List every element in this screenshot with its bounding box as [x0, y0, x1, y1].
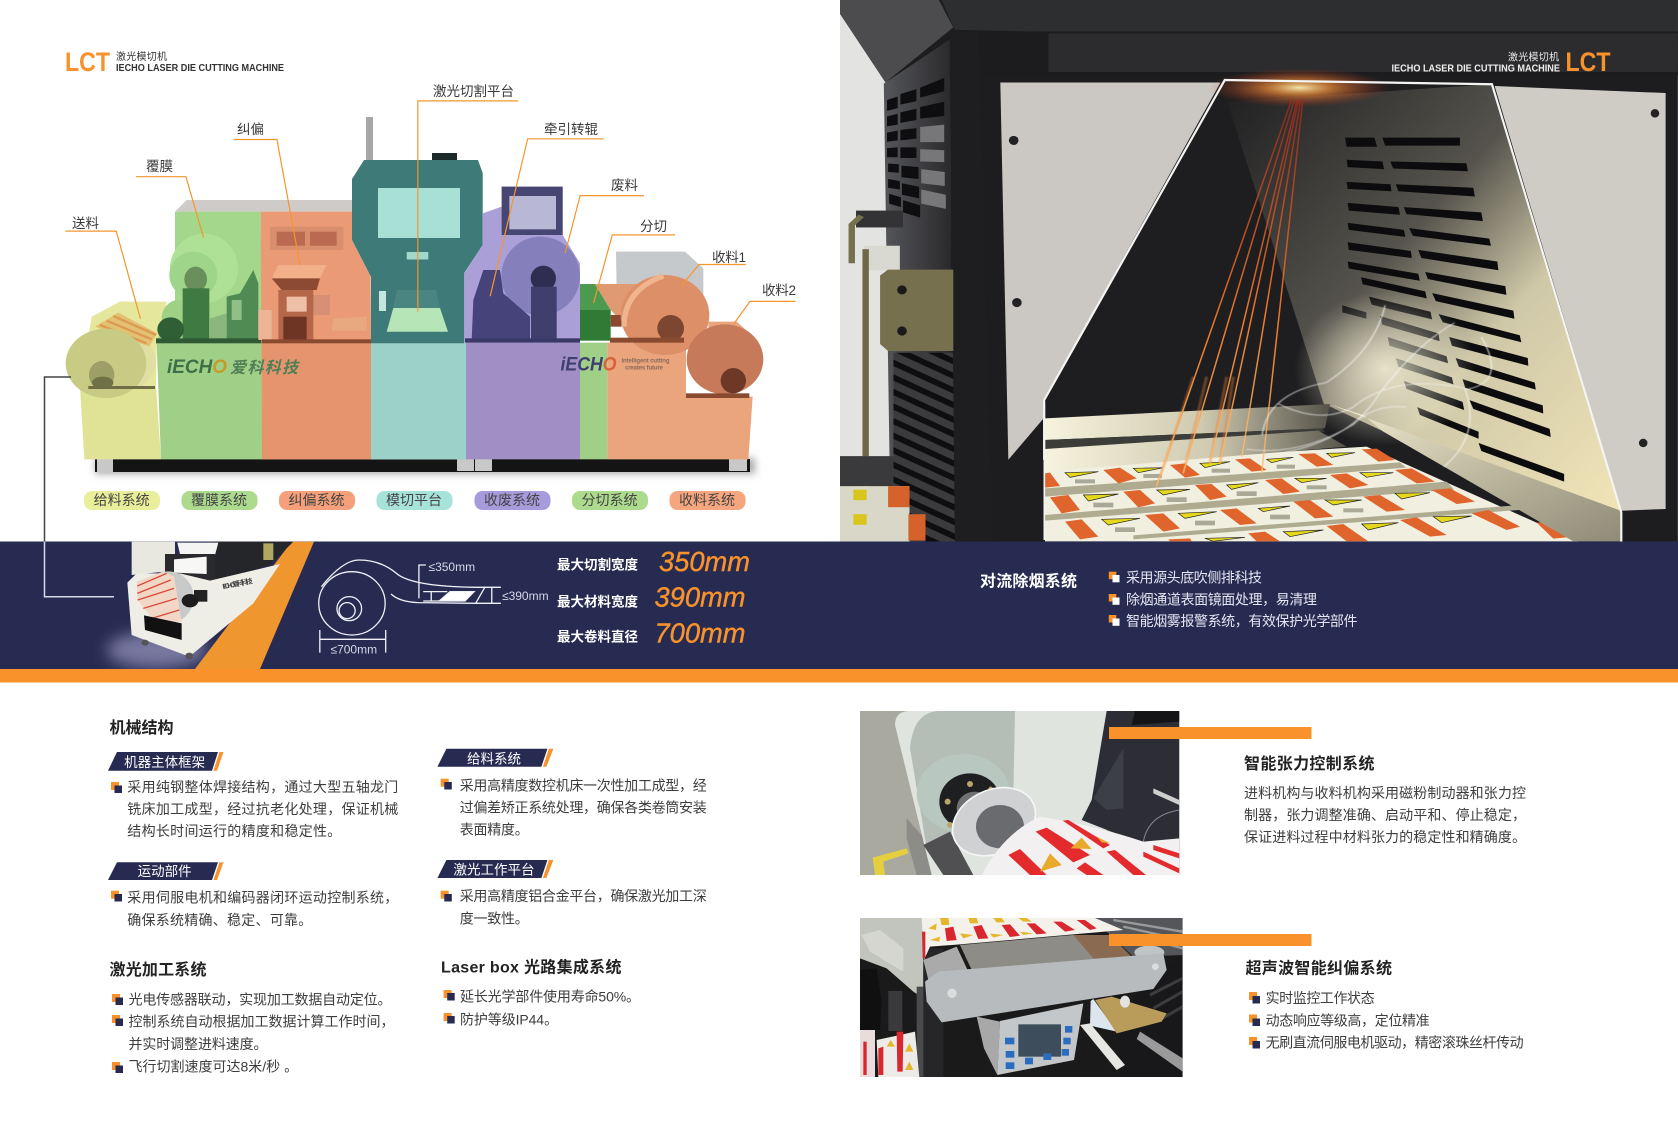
specification: max material width: 390mm — [654, 582, 746, 612]
zone: rewind (orange) — [595, 275, 763, 459]
callout labels: 废料 — [611, 178, 638, 193]
zone: die cutting tower (teal) — [352, 117, 483, 460]
text: web guide bullets: 无刷直流伺服电机驱动，精密滚珠丝杆传动 — [1266, 1034, 1524, 1050]
tag: machine frame — [108, 752, 224, 771]
leader line to feed unit close-up — [44, 377, 114, 597]
system legend pills: 收料系统 — [679, 492, 735, 508]
orange divider band — [0, 669, 1678, 682]
text: laser processing: 飞行切割速度可达8米/秒 。 — [128, 1058, 298, 1074]
text: tension control: 制器，张力调整准确、启动平和、停止稳定， — [1244, 807, 1526, 823]
roof — [840, 0, 953, 82]
side perforated panel — [884, 39, 960, 542]
text: laser work platform — [441, 888, 707, 926]
callout labels: 收料2 — [762, 283, 796, 298]
photo: laser chamber (right top) — [840, 0, 1678, 542]
callout labels: 分切 — [640, 219, 667, 234]
text: tension control: 进料机构与收料机构采用磁粉制动器和张力控 — [1244, 785, 1526, 801]
machine shadow and black base — [95, 458, 755, 474]
text: laser box — [444, 988, 640, 1028]
text: feed system: 采用高精度数控机床一次性加工成型，经 — [460, 778, 707, 794]
photo: ultrasonic web guide — [860, 918, 1183, 1077]
text: laser processing: 光电传感器联动，实现加工数据自动定位。 — [128, 992, 392, 1008]
specification: max cut width — [557, 546, 750, 577]
specification: max roll diameter — [557, 618, 746, 648]
text: machine frame: 采用纯钢整体焊接结构，通过大型五轴龙门 — [127, 779, 398, 795]
system legend pills: 分切系统 — [582, 492, 638, 508]
callout labels: 送料 — [72, 216, 100, 231]
callout lines — [65, 101, 796, 324]
heading: mechanical structure: 机械结构 — [110, 719, 174, 737]
text: laser box: 防护等级IP44。 — [460, 1012, 558, 1028]
smoke extraction heading: 对流除烟系统 — [980, 572, 1077, 590]
label rows — [1045, 449, 1567, 541]
text: web guide bullets: 动态响应等级高，定位精准 — [1266, 1012, 1430, 1028]
system legend pills — [84, 491, 746, 510]
text: feed system — [441, 778, 707, 838]
text: motion parts: 采用伺服电机和编码器闭环运动控制系统， — [127, 890, 398, 906]
callout labels: 纠偏 — [237, 122, 264, 137]
laser head glow — [1209, 68, 1390, 107]
heading: tension control system: 智能张力控制系统 — [1244, 754, 1374, 773]
callout labels: 牵引转辊 — [544, 122, 598, 137]
orange accent bar: tension — [1109, 727, 1312, 739]
specification: max roll diameter: 700mm — [654, 618, 746, 648]
smoke extraction bullets: 除烟通道表面镜面处理，易清理 — [1126, 592, 1317, 608]
zone: web guide (orange) — [258, 212, 372, 459]
specification: max material width — [557, 582, 746, 612]
tag: feed system: 给料系统 — [467, 752, 521, 766]
smoke extraction bullets: 采用源头底吹侧排科技 — [1126, 570, 1262, 586]
dimension labels: ≤390mm — [502, 589, 549, 603]
chamber floor with labels, strips, beams, smoke — [1044, 377, 1622, 541]
callout labels: 覆膜 — [146, 159, 173, 174]
heading: laser box: Laser box 光路集成系统 — [441, 958, 622, 976]
text: laser work platform: 采用高精度铝合金平台，确保激光加工深 — [460, 888, 707, 904]
system legend pills: 覆膜系统 — [191, 492, 247, 508]
logo: iECHO 爱科科技: 爱科科技 — [230, 359, 300, 377]
grey rear box — [616, 252, 703, 317]
brand header: left: 激光模切机 — [116, 50, 167, 63]
text: motion parts: 确保系统精确、稳定、可靠。 — [127, 912, 312, 928]
brand header: right: IECHO LASER DIE CUTTING MACHINE — [1392, 62, 1560, 74]
text: laser processing — [112, 992, 394, 1074]
callout labels: 收料1 — [712, 250, 746, 265]
dimension labels: ≤700mm — [330, 642, 377, 656]
specification: max material width: 最大材料宽度 — [557, 594, 638, 610]
system legend pills: 纠偏系统 — [288, 492, 344, 508]
text: feed system: 表面精度。 — [460, 822, 529, 838]
roll dimensions diagram — [319, 560, 501, 653]
text: motion parts — [111, 890, 398, 928]
white chamber edge — [1042, 403, 1047, 540]
feed unit close-up picture — [107, 542, 314, 669]
small logo on close-up: IECHO 爱科科技 — [222, 576, 253, 591]
text: laser box: 延长光学部件使用寿命50%。 — [460, 988, 640, 1004]
laser beam glow — [1157, 377, 1233, 487]
specification: max cut width: 350mm — [659, 546, 750, 577]
zone: lamination (green) — [156, 212, 262, 459]
photo: tension control — [860, 711, 1179, 875]
brand header: right: LCT — [1566, 47, 1611, 77]
zone: waste, slitting, rewind — [464, 187, 763, 459]
logo: iECHO slogan — [560, 354, 670, 376]
back of chamber — [1044, 82, 1621, 542]
text: web guide bullets: 实时监控工作状态 — [1266, 990, 1375, 1006]
orange accent bar: web guide — [1109, 934, 1312, 946]
system legend pills: 收废系统 — [484, 492, 540, 508]
specification: max roll diameter: 最大卷料直径 — [557, 628, 638, 644]
right inner panel — [1495, 86, 1666, 511]
text: web guide bullets — [1249, 990, 1524, 1050]
text: tension control: 保证进料过程中材料张力的稳定性和精确度。 — [1244, 829, 1526, 845]
metal strips — [1045, 404, 1347, 472]
tag: motion parts — [108, 862, 224, 880]
specification: max cut width: 最大切割宽度 — [557, 556, 638, 572]
laser beams and chamber outline — [1044, 80, 1621, 542]
dimension labels: ≤350mm — [428, 560, 475, 574]
tag: machine frame: 机器主体框架 — [124, 755, 205, 770]
text: machine frame — [111, 779, 398, 839]
lower left labels — [840, 456, 926, 542]
tag: laser work platform: 激光工作平台 — [454, 862, 534, 878]
callout labels — [72, 83, 796, 298]
left wall — [840, 11, 891, 456]
brand header: right: 激光模切机 — [1508, 50, 1559, 64]
tag: motion parts: 运动部件 — [138, 864, 192, 879]
brand header: left: LCT — [65, 47, 110, 77]
text: laser processing: 控制系统自动根据加工数据计算工作时间， — [128, 1014, 394, 1030]
zone: waste rewind (purple) — [464, 187, 580, 459]
machine diagram with coloured system zones — [66, 117, 763, 474]
text: machine frame: 铣床加工成型，经过抗老化处理，保证机械 — [127, 801, 398, 817]
text: feed system: 过偏差矫正系统处理，确保各类卷筒安装 — [460, 800, 707, 816]
smoke extraction bullets — [1109, 570, 1358, 629]
wall flange — [1328, 404, 1622, 541]
smoke extraction bullets: 智能烟雾报警系统，有效保护光学部件 — [1126, 613, 1358, 629]
logo: iECHO slogan: iECHO — [560, 354, 617, 376]
system legend pills: 模切平台 — [386, 492, 442, 508]
logo: iECHO 爱科科技 — [167, 357, 300, 378]
brand header: right — [1392, 47, 1611, 77]
navy specification band — [0, 542, 1678, 669]
tag: feed system — [437, 749, 553, 767]
zone: feed (yellow) — [66, 302, 167, 459]
zone: slitting (green) — [580, 284, 611, 459]
logo: iECHO 爱科科技: iECHO — [167, 357, 227, 378]
zone: feed, lamination, web guide — [66, 200, 372, 459]
pillar — [950, 39, 960, 542]
dimension labels — [330, 560, 549, 656]
brand header: left — [65, 47, 284, 77]
wall slots — [1342, 138, 1564, 482]
text: laser work platform: 度一致性。 — [460, 910, 529, 926]
bracket and latch — [848, 210, 954, 486]
tag: laser work platform — [437, 860, 553, 878]
brand header: left: IECHO LASER DIE CUTTING MACHINE — [116, 62, 284, 74]
floor sheet — [1045, 447, 1578, 541]
heading: ultrasonic web guide: 超声波智能纠偏系统 — [1246, 958, 1392, 978]
system legend pills: 给料系统 — [94, 492, 150, 508]
callout labels: 激光切割平台 — [433, 83, 514, 99]
logo: iECHO slogan: Intelligent cutting — [622, 358, 670, 364]
heading: laser processing system: 激光加工系统 — [110, 960, 206, 979]
logo: iECHO slogan: creates future — [625, 366, 664, 372]
left inner panel — [1000, 82, 1220, 460]
hot light on wall — [1299, 297, 1472, 442]
angled perforated wall — [1227, 84, 1621, 527]
text: machine frame: 结构长时间运行的精度和稳定性。 — [127, 823, 341, 839]
text: tension control — [1244, 785, 1526, 845]
text: laser processing: 并实时调整进料速度。 — [128, 1036, 268, 1052]
